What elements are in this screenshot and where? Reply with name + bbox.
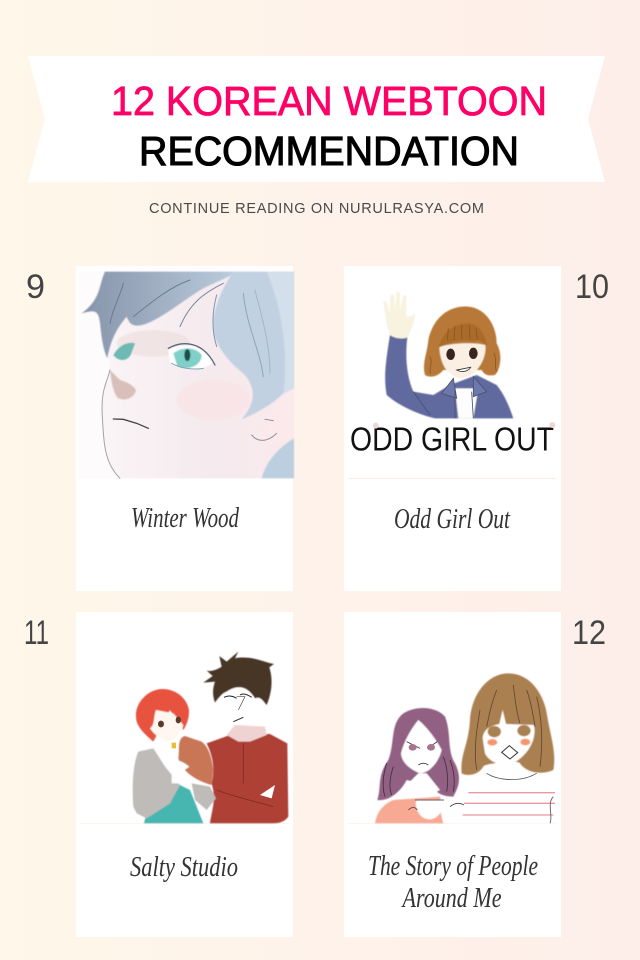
caption: Winter Wood [131, 502, 239, 534]
illustration: Salty Studio [80, 652, 288, 824]
number 9: 9 [26, 268, 45, 306]
caption line 2: Around Me [401, 882, 502, 914]
number 12: 12 [572, 614, 606, 652]
logo text: ODD GIRL OUT [350, 421, 554, 458]
title line 2: RECOMMENDATION [139, 128, 519, 174]
title line 1: 12 KOREAN WEBTOON [111, 78, 547, 124]
panel: Winter Wood [76, 266, 294, 591]
panel: Salty Studio [76, 612, 293, 937]
illustration: Odd Girl Out [350, 292, 555, 458]
subtitle: CONTINUE READING ON NURULRASYA.COM [149, 201, 484, 217]
caption: Odd Girl Out [394, 503, 511, 535]
number 11: 11 [24, 614, 49, 652]
number 10: 10 [575, 268, 609, 306]
caption: The Story of People [368, 850, 538, 882]
panel: Odd Girl Out [344, 266, 561, 591]
illustration: Winter Wood portrait [79, 272, 294, 478]
title banner [28, 56, 605, 182]
caption: Salty Studio [130, 851, 238, 883]
illustration: The Story of People Around Me [349, 673, 557, 824]
panel: The Story of People Around Me [344, 612, 561, 937]
